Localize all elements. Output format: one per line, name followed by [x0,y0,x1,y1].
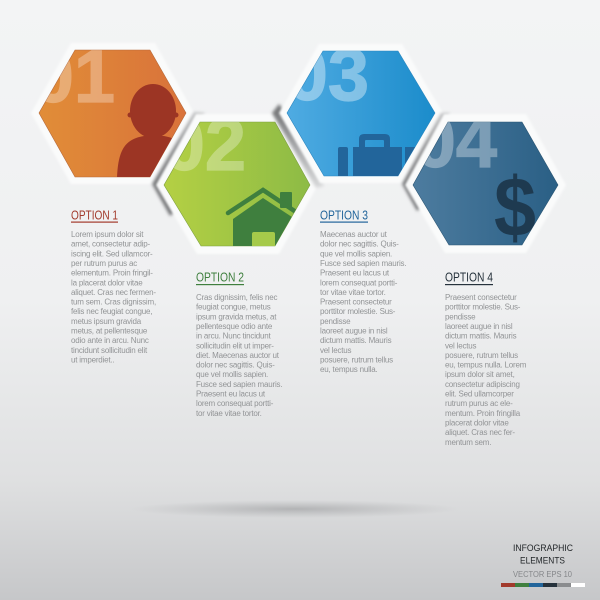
heading: option 4: OPTION 4 [445,270,493,284]
body: option 1: Lorem ipsum dolor sit [71,230,144,239]
body: option 3: Praesent eu lacus ut [320,269,390,278]
body: option 3: lorem consequat portti- [320,278,398,287]
body: option 4: laoreet augue in nisl [445,322,513,331]
body: option 1: aliquet. Cras nec fermen- [71,288,156,297]
body: option 3: dictum mattis. Mauris [320,336,392,345]
body: option 1: odio ante in arcu. Nunc [71,336,149,345]
hexagon 1: orange person [34,50,192,183]
body: option 4: mentum sem. [445,438,491,447]
footer label: VECTOR EPS 10 [513,569,572,579]
body: option 3: porttitor molestie. Sus- [320,307,396,316]
body: option 2: tor vitae vitae tortor. [196,409,262,418]
number 03: 03 [287,33,369,116]
body: option 2: sollicitudin elit ut imper- [196,341,274,350]
number 04: 04 [415,100,497,183]
body: option 1: amet, consectetur adip- [71,240,151,249]
heading: option 2: OPTION 2 [196,270,244,284]
body: option 2: Cras dignissim, felis nec [196,293,277,302]
body: option 1: felis nec feugiat congue, [71,307,152,316]
body: option 4: aliquet. Cras nec fer- [445,428,515,437]
body: option 4: ipsum dolor sit amet, [445,370,515,379]
option 2 text [196,270,282,418]
icon: briefcase [338,134,417,178]
body: option 3: laoreet augue in nisl [320,326,388,336]
body: option 4: vel lectus [445,341,477,350]
body: option 1: ut imperdiet.. [71,356,114,364]
body: option 3: Praesent consectetur [320,298,392,307]
footer label [513,543,573,579]
body: option 2: lorem consequat portti- [196,399,274,408]
body: option 4: Praesent consectetur [445,293,517,302]
hexagon 3: blue briefcase [270,50,440,188]
body: option 4: dictum mattis. Mauris [445,332,517,341]
body: option 2: Praesent eu lacus ut [196,390,266,398]
body: option 2: ipsum gravida metus, at [196,312,277,321]
body: option 4: mentum. Proin fringilla [445,409,521,418]
body: option 1: metus ipsum gravida [71,317,142,326]
body: option 2: pellentesque odio ante [196,322,273,331]
body: option 4: elit. Sed ullamcorper [445,390,514,398]
body: option 1: metus, at pellentesque [71,326,148,336]
body: option 3: tor vitae vitae tortor. [320,288,386,297]
heading: option 3: OPTION 3 [320,208,368,222]
number 02: 02 [164,103,246,186]
body: option 4: posuere, rutrum tellus [445,351,518,360]
number 01: 01 [33,35,115,118]
body: option 4: porttitor molestie. Sus- [445,303,521,312]
body: option 4: eu, tempus nulla. Lorem [445,361,527,370]
body: option 3: Maecenas auctor ut [320,230,388,239]
body: option 3: pendisse [320,317,351,326]
footer label: ELEMENTS [520,556,565,566]
body: option 3: vel lectus [320,346,352,355]
icon: house [228,190,296,250]
floor shadow [130,500,460,518]
body: option 1: tum sem. Cras dignissim, [71,298,156,307]
body: option 2: dolor nec sagittis. Quis- [196,361,275,370]
body: option 4: consectetur adipiscing [445,380,520,389]
body: option 4: pendisse [445,312,476,321]
body: option 3: que vel mollis sapien. [320,249,392,258]
option 1 text [71,208,156,364]
body: option 2: feugiat congue, metus [196,303,271,312]
footer label: INFOGRAPHIC [513,543,573,554]
body: option 2: in arcu. Nunc tincidunt [196,332,272,341]
body: option 3: dolor nec sagittis. Quis- [320,240,399,249]
icon: person [117,84,178,177]
body: option 2: diet. Maecenas auctor ut [196,351,280,360]
option 3 text [320,208,406,374]
colour bar [501,583,585,587]
body: option 3: Fusce sed sapien mauris. [320,259,406,268]
body: option 1: iscing elit. Sed ullamcor- [71,249,153,258]
hexagon 2: green house [152,103,318,254]
body: option 4: placerat dolor vitae [445,418,509,428]
body: option 2: Fusce sed sapien mauris. [196,380,282,389]
option 4 text [445,270,527,447]
body: option 1: per rutrum purus ac [71,259,137,268]
body: option 3: eu, tempus nulla. [320,365,378,374]
body: option 1: tincidunt sollicitudin elit [71,346,148,355]
body: option 1: la placerat dolor vitae [71,278,143,287]
body: option 4: rutrum purus ac ele- [445,399,513,408]
heading: option 1: OPTION 1 [71,208,118,222]
icon: dollar sign: $ [494,160,536,254]
body: option 2: que vel mollis sapien. [196,370,268,379]
body: option 3: posuere, rutrum tellus [320,356,393,364]
hexagon 4: dark blue dollar [402,100,566,254]
body: option 1: elementum. Proin fringil- [71,269,153,278]
